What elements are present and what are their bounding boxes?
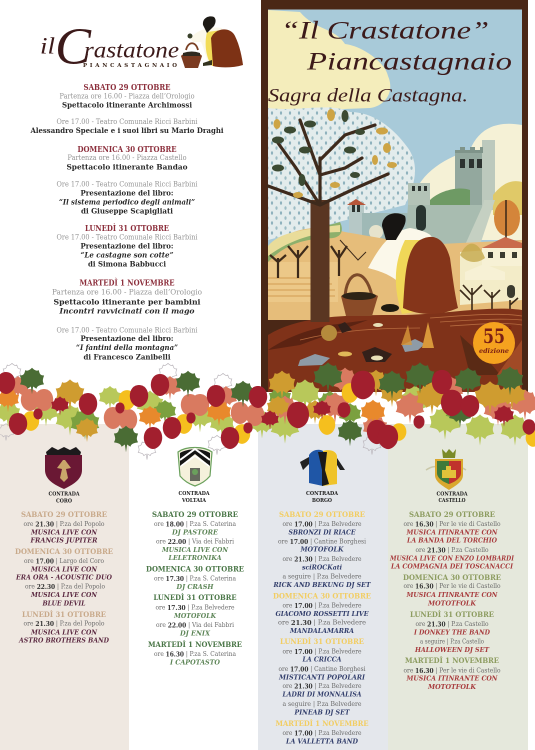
text block: domenica 30 ottobre: Partenza ore 16.00 - Piazza Castello bbox=[68, 153, 187, 162]
text block: lunedì 31 ottobre: Presentazione del libro: bbox=[80, 242, 174, 250]
text block: sabato 29 ottobre: Partenza ore 16.00 - Piazza dell’Orologio bbox=[60, 92, 195, 100]
ground bbox=[268, 309, 522, 392]
schedule: voltaia bbox=[146, 510, 244, 666]
schedule: coro: BLUE DEVIL bbox=[42, 600, 86, 608]
schedule: castello: HALLOWEEN DJ SET bbox=[414, 646, 490, 654]
schedule: borgo: MANDALAMARRA bbox=[289, 627, 354, 635]
panel: contrada castello bbox=[389, 449, 515, 691]
schedule: borgo: a seguire | P.za Belvedere bbox=[282, 574, 362, 580]
schedule: castello: LA COMPAGNIA DEI TOSCANACCI bbox=[390, 562, 514, 570]
schedule: castello: MUSICA LIVE CON ENZO LOMBARDI bbox=[389, 554, 515, 562]
callout: 55 edizione badge: ° bbox=[508, 326, 512, 336]
schedule: castello: I DONKEY THE BAND bbox=[413, 628, 490, 636]
text block: lunedì 31 ottobre: LUNEDÌ 31 OTTOBRE bbox=[85, 223, 169, 233]
schedule: borgo: a seguire | P.za Belvedere bbox=[282, 701, 362, 708]
schedule: castello: ore 16.30 | Per le vie di Castello bbox=[404, 521, 501, 528]
schedule: borgo: ore 21.30 | P.za Belvedere bbox=[282, 556, 362, 563]
text block: martedì 1 novembre: Partenza ore 16.00 - Piazza dell’Orologio bbox=[52, 288, 203, 296]
icon: chestnut tree bbox=[268, 109, 397, 322]
schedule: castello: a seguire | P.za Castello bbox=[420, 638, 484, 646]
text block: lunedì 31 ottobre: Ore 17.00 - Teatro Comunale Ricci Barbini bbox=[56, 232, 198, 242]
text block: martedì 1 novembre: Presentazione del libro: bbox=[80, 334, 174, 343]
text block: sabato 29 ottobre bbox=[30, 82, 224, 135]
schedule: castello: MARTEDÌ 1 NOVEMBRE bbox=[405, 656, 499, 665]
panel: contrada backgrounds bbox=[0, 424, 528, 750]
callout: 55 edizione badge bbox=[473, 322, 515, 364]
schedule: coro: MUSICA LIVE CON bbox=[30, 628, 98, 636]
text block: martedì 1 novembre: Incontri ravvicinati con il mago bbox=[58, 306, 195, 316]
schedule: coro bbox=[15, 510, 113, 644]
label: contrada coro bbox=[48, 492, 80, 504]
schedule: voltaia: DJ PASTORE bbox=[171, 528, 218, 536]
callout: 55 edizione badge: 55 bbox=[483, 324, 505, 348]
text block: martedì 1 novembre: Ore 17.00 - Teatro Comunale Ricci Barbini bbox=[56, 326, 198, 334]
schedule: voltaia: MUSICA LIVE CON bbox=[161, 546, 229, 554]
schedule: coro: MUSICA LIVE CON bbox=[30, 565, 98, 573]
icon: house bbox=[460, 237, 522, 312]
text block: martedì 1 novembre: MARTEDÌ 1 NOVEMBRE bbox=[80, 278, 174, 288]
schedule: castello: MUSICA ITINRANTE CON bbox=[406, 675, 499, 683]
schedule: coro: ERA ORA - ACOUSTIC DUO bbox=[15, 574, 112, 582]
panel: contrada coro bbox=[15, 447, 113, 644]
schedule: borgo: ore 17.00 | Cantine Borghesi bbox=[278, 538, 366, 546]
schedule: voltaia: SABATO 29 OTTOBRE bbox=[152, 510, 238, 519]
schedule: voltaia: DJ ENIX bbox=[179, 630, 211, 638]
schedule: castello: LUNEDÌ 31 OTTOBRE bbox=[410, 610, 494, 619]
schedule: castello: LA BANDA DEL TORCHIO bbox=[406, 537, 497, 545]
text block: martedì 1 novembre: “I fantini della montagna” bbox=[76, 343, 178, 352]
schedule: castello: MUSICA ITINRANTE CON bbox=[406, 529, 499, 537]
schedule: borgo: DOMENICA 30 OTTOBRE bbox=[273, 592, 371, 600]
panel: events list bbox=[30, 82, 224, 362]
schedule: borgo: ore 17.00 | Cantine Borghesi bbox=[278, 666, 366, 673]
schedule: coro: FRANCIS JUPITER bbox=[29, 537, 98, 545]
schedule: borgo: LA CRICCA bbox=[302, 656, 342, 664]
schedule: voltaia: LELETRONIKA bbox=[168, 554, 222, 562]
schedule: voltaia: I CAPOTASTO bbox=[169, 658, 220, 666]
logo: il Crastatone: C bbox=[55, 18, 92, 76]
schedule: voltaia: DJ CRASH bbox=[175, 583, 214, 591]
callout: 55 edizione badge: edizione bbox=[479, 347, 510, 355]
label: contrada castello: CONTRADA bbox=[436, 492, 468, 498]
text block: domenica 30 ottobre: Spettacolo itinerante Bandao bbox=[66, 162, 188, 172]
schedule: borgo: MISTICANTI POPOLARI bbox=[278, 673, 366, 681]
label: contrada borgo: CONTRADA bbox=[306, 491, 339, 497]
logo: il Crastatone: il bbox=[40, 34, 55, 58]
schedule: borgo: MOTOFOLK bbox=[300, 546, 344, 554]
schedule: castello bbox=[389, 510, 515, 691]
schedule: borgo: LUNEDÌ 31 OTTOBRE bbox=[280, 637, 364, 646]
text block: domenica 30 ottobre: “Il sistema periodico degli animali” bbox=[59, 198, 195, 206]
schedule: castello: SABATO 29 OTTOBRE bbox=[409, 510, 495, 519]
schedule: coro: MUSICA LIVE CON bbox=[30, 529, 98, 537]
schedule: voltaia: ore 22.00 | Via dei Fabbri bbox=[156, 538, 234, 546]
poster title bbox=[268, 18, 512, 106]
schedule: borgo: PINEAB DJ SET bbox=[294, 708, 351, 716]
text block: martedì 1 novembre: Spettacolo itinerante per bambini bbox=[54, 298, 201, 306]
schedule: voltaia: ore 16.30 | P.za S. Caterina bbox=[154, 651, 236, 658]
icon: autumn tree right bbox=[494, 200, 520, 238]
schedule: voltaia: ore 18.00 | P.za S. Caterina bbox=[154, 521, 236, 528]
schedule: voltaia: ore 17.30 | P.za Belvedere bbox=[156, 604, 235, 612]
schedule: castello: MOTOTFOLK bbox=[427, 599, 476, 607]
text block: domenica 30 ottobre: Ore 17.00 - Teatro Comunale Ricci Barbini bbox=[56, 180, 198, 188]
icon: figure bending over bbox=[368, 213, 458, 314]
schedule: borgo: ore 17.00 | P.za Belvedere bbox=[282, 521, 362, 528]
schedule: coro: LUNEDÌ 31 OTTOBRE bbox=[22, 610, 106, 619]
schedule: borgo: LADRI DI MONNALISA bbox=[282, 691, 362, 699]
text block: martedì 1 novembre bbox=[52, 278, 203, 362]
schedule: borgo: ore 17.00 | P.za Belvedere bbox=[282, 648, 362, 656]
schedule: borgo: ore 21.30 | P.za Belvedere bbox=[282, 683, 362, 690]
garland of autumn leaves bbox=[0, 362, 535, 460]
icon: chestnut basket bbox=[341, 275, 399, 316]
panel: contrada voltaia bbox=[146, 448, 244, 666]
label: contrada coro: CORO bbox=[56, 498, 72, 504]
schedule: castello: DOMENICA 30 OTTOBRE bbox=[403, 573, 501, 582]
text block: domenica 30 ottobre: DOMENICA 30 OTTOBRE bbox=[78, 144, 176, 154]
schedule: castello: MOTOTFOLK bbox=[427, 683, 476, 691]
schedule: borgo: ore 17.00 | P.za Belvedere bbox=[282, 730, 362, 737]
logo: il Crastatone: PIANCASTAGNAIO bbox=[83, 63, 177, 69]
schedule: coro: MUSICA LIVE CON bbox=[30, 591, 98, 599]
schedule: coro: ore 21.30 | P.za del Popolo bbox=[24, 521, 105, 528]
icon: castello crest bbox=[426, 449, 466, 490]
poster title: Sagra della Castagna. bbox=[268, 86, 468, 106]
schedule: coro: ore 17.00 | Largo del Coro bbox=[24, 558, 104, 565]
icon: voltaia crest bbox=[178, 448, 212, 486]
text block: sabato 29 ottobre: SABATO 29 OTTOBRE bbox=[84, 82, 170, 92]
text block: lunedì 31 ottobre: “Le castagne son cotte” bbox=[80, 250, 174, 260]
label: contrada coro: CONTRADA bbox=[48, 492, 80, 498]
icon: figure with basket bbox=[181, 16, 243, 68]
logo: il Crastatone: rastatone bbox=[84, 38, 179, 62]
icon: borgo crest bbox=[300, 450, 345, 486]
schedule: castello: ore 16.30 | Per le vie di Castello bbox=[404, 668, 501, 674]
text block: martedì 1 novembre: di Francesco Zanibelli bbox=[84, 352, 171, 362]
schedule: castello: ore 21.30 | P.za Castello bbox=[416, 621, 489, 628]
schedule: coro: ore 22.30 | P.za del Popolo bbox=[25, 584, 105, 590]
label: contrada voltaia bbox=[178, 491, 210, 504]
panel: poster illustration bbox=[261, 0, 528, 392]
schedule: voltaia: LUNEDÌ 31 OTTOBRE bbox=[154, 593, 237, 602]
schedule: borgo: ore 21.30 | P.za Belvedere bbox=[278, 620, 366, 626]
schedule: castello: MUSICA ITINRANTE CON bbox=[406, 591, 499, 599]
schedule: borgo: SABATO 29 OTTOBRE bbox=[279, 510, 365, 519]
schedule: voltaia: ore 22.00 | Via dei Fabbri bbox=[156, 622, 234, 629]
schedule: castello: ore 16.30 | Per le vie di Castello bbox=[404, 583, 501, 590]
label: contrada borgo bbox=[306, 491, 339, 504]
schedule: borgo: sciROCKati bbox=[302, 564, 343, 572]
text block: domenica 30 ottobre: di Giuseppe Scapigliati bbox=[81, 206, 173, 216]
text block: lunedì 31 ottobre: di Simona Babbucci bbox=[88, 260, 166, 268]
landscape fields bbox=[268, 222, 522, 320]
schedule: castello: ore 21.30 | P.za Castello bbox=[416, 547, 489, 554]
icon: coro crest bbox=[45, 447, 82, 489]
text block: sabato 29 ottobre: Spettacolo itinerante Archimossi bbox=[62, 100, 192, 110]
icon: castle towers bbox=[347, 140, 522, 249]
schedule: voltaia: DOMENICA 30 OTTOBRE bbox=[146, 564, 244, 574]
label: contrada voltaia: VOLTAIA bbox=[181, 498, 207, 504]
label: contrada borgo: BORGO bbox=[312, 498, 332, 504]
schedule: borgo: GIACOMO ROSSETTI LIVE bbox=[276, 610, 369, 618]
text block: domenica 30 ottobre bbox=[56, 144, 198, 216]
schedule: borgo bbox=[273, 510, 372, 746]
schedule: coro: ore 21.30 | P.za del Popolo bbox=[24, 620, 105, 628]
schedule: borgo: SBRONZI DI RIACE bbox=[288, 529, 356, 537]
text block: lunedì 31 ottobre bbox=[56, 223, 198, 268]
poster title: “Il Crastatone” bbox=[281, 18, 489, 44]
schedule: borgo: RICK AND BEKUNG DJ SET bbox=[273, 581, 372, 589]
schedule: voltaia: MARTEDÌ 1 NOVEMBRE bbox=[148, 640, 242, 649]
label: contrada voltaia: CONTRADA bbox=[178, 491, 210, 497]
label: contrada castello bbox=[436, 492, 468, 504]
schedule: voltaia: MOTOFOLK bbox=[173, 612, 216, 620]
schedule: voltaia: ore 17.30 | P.za S. Caterina bbox=[154, 576, 236, 582]
panel: contrada borgo bbox=[273, 450, 372, 746]
schedule: borgo: ore 17.00 | P.za Belvedere bbox=[282, 602, 362, 610]
logo: il Crastatone bbox=[40, 18, 179, 76]
label: contrada castello: CASTELLO bbox=[438, 498, 466, 504]
text block: sabato 29 ottobre: Alessandro Speciale e i suoi libri su Mario Draghi bbox=[30, 126, 224, 135]
schedule: borgo: LA VALLETTA BAND bbox=[285, 738, 358, 746]
text block: domenica 30 ottobre: Presentazione del libro: bbox=[80, 188, 174, 198]
poster title: Piancastagnaio bbox=[306, 48, 512, 76]
text block: sabato 29 ottobre: Ore 17.00 - Teatro Comunale Ricci Barbini bbox=[56, 117, 198, 126]
schedule: borgo: MARTEDÌ 1 NOVEMBRE bbox=[276, 719, 369, 728]
schedule: coro: ASTRO BROTHERS BAND bbox=[18, 636, 109, 644]
schedule: coro: DOMENICA 30 OTTOBRE bbox=[15, 547, 113, 556]
schedule: coro: SABATO 29 OTTOBRE bbox=[21, 510, 107, 519]
